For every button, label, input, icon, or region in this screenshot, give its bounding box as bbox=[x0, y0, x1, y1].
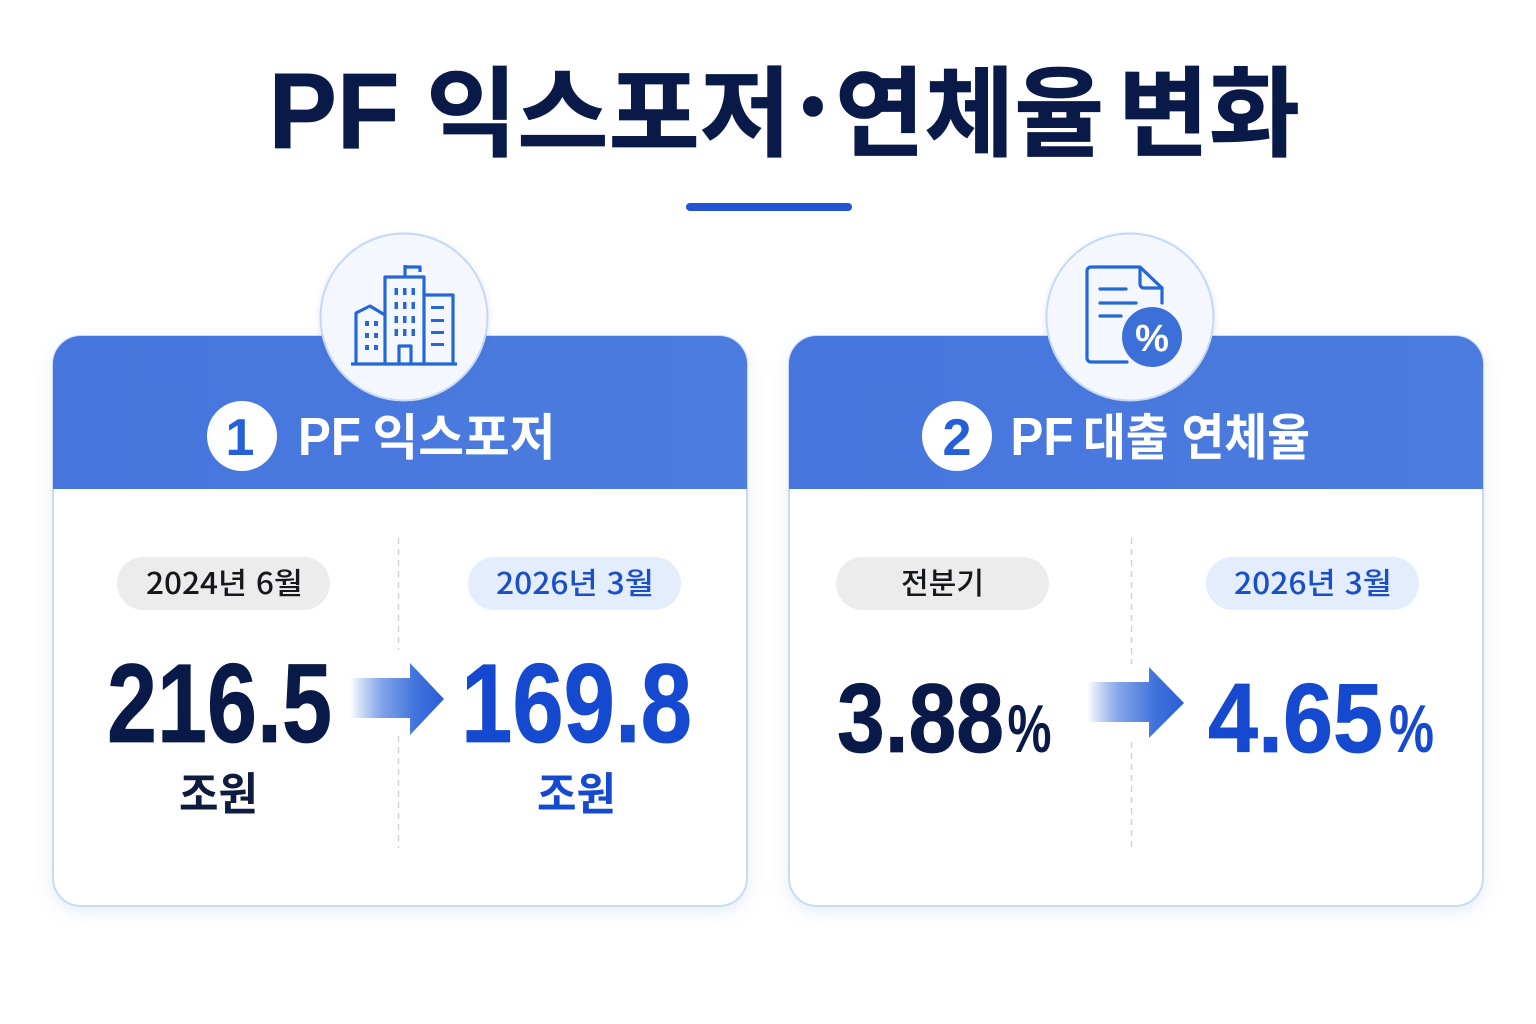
panel: PF loan delinquency rate bbox=[789, 234, 1483, 906]
value: 216.5 조원 bbox=[107, 641, 332, 823]
card header band bbox=[53, 336, 747, 489]
icon: document with percent: % bbox=[1135, 318, 1169, 360]
number badge 2: 2 bbox=[943, 409, 971, 467]
panel: PF exposure bbox=[53, 234, 747, 906]
pill: 2024년 6월: 2024년 6월 bbox=[146, 559, 303, 603]
value: 3.88%: 3.88 bbox=[837, 663, 1004, 773]
title: · bbox=[796, 25, 830, 176]
icon: office buildings bbox=[320, 234, 488, 400]
panel heading: 익스포저 bbox=[372, 398, 556, 470]
title: 연체율 bbox=[835, 35, 1104, 177]
title: 변화 bbox=[1118, 35, 1300, 177]
pill: 전분기: 전분기 bbox=[901, 559, 984, 603]
card body bbox=[53, 336, 747, 906]
pill: 2026년 3월 bbox=[1206, 557, 1419, 610]
number badge 1 bbox=[207, 401, 277, 471]
arrow bbox=[350, 663, 444, 735]
value: 169.8 조원 bbox=[461, 641, 692, 823]
pill: 2026년 3월 bbox=[468, 557, 681, 610]
value: 169.8 조원: 조원 bbox=[537, 758, 616, 823]
icon: document with percent bbox=[1046, 234, 1214, 400]
number badge 1: 1 bbox=[226, 409, 254, 467]
title underline bbox=[686, 203, 852, 211]
title: PF bbox=[268, 50, 400, 171]
value: 169.8 조원: 169.8 bbox=[461, 641, 692, 766]
pill: 전분기 bbox=[836, 557, 1049, 610]
value: 4.65%: 4.65 bbox=[1208, 663, 1383, 773]
value: 3.88%: % bbox=[1008, 691, 1052, 767]
panel heading: PF bbox=[1010, 407, 1074, 467]
card body bbox=[789, 336, 1483, 906]
title bbox=[268, 25, 1300, 177]
panel heading: 대출 연체율 bbox=[1083, 398, 1310, 470]
title: 익스포저 bbox=[426, 35, 791, 177]
number badge 2 bbox=[922, 401, 992, 471]
pill: 2026년 3월: 2026년 3월 bbox=[1234, 559, 1392, 603]
pill: 2024년 6월 bbox=[117, 557, 330, 610]
panel heading: PF bbox=[298, 407, 361, 467]
value: 216.5 조원: 216.5 bbox=[107, 641, 332, 766]
card header band bbox=[789, 336, 1483, 489]
arrow bbox=[1087, 667, 1184, 738]
value: 4.65%: % bbox=[1389, 691, 1434, 767]
pill: 2026년 3월: 2026년 3월 bbox=[496, 559, 654, 603]
value: 216.5 조원: 조원 bbox=[179, 758, 258, 823]
